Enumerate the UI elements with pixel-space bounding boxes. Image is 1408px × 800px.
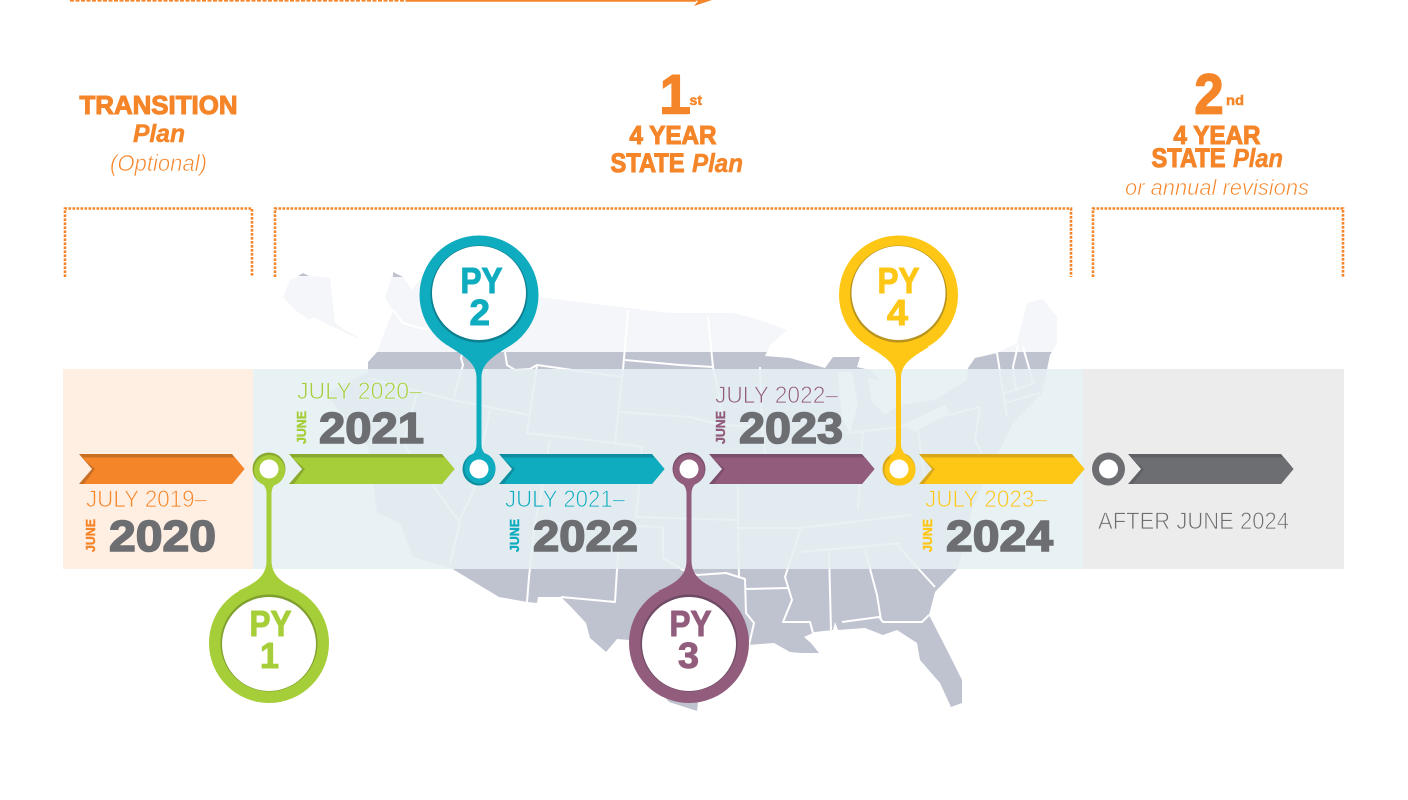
bracket: transition plan [65,208,252,277]
pin: program year 1: PY [250,603,292,644]
heading: 1st 4 year state plan [610,62,743,178]
date label: 2021-2022 [505,486,638,561]
pin: program year 3: 3 [678,635,699,676]
date label: 2019-2020: JULY 2019– [86,486,208,513]
pin: program year 4 [839,236,958,486]
heading: transition plan: Plan [133,120,185,148]
pin: program year 2: 2 [470,292,490,333]
date label: 2020-2021: 2021 [319,404,424,453]
pin: program year 1: 1 [260,635,279,676]
date label: 2019-2020 [83,486,216,561]
pin: program year 3 [629,452,749,703]
date label: 2023-2024: JULY 2023– [925,486,1048,513]
heading: 1st 4 year state plan: Plan [692,148,743,178]
arrow: program year 1 [289,454,454,484]
heading: 2nd 4 year state plan: nd [1226,92,1244,108]
node: after June 2024 [1092,452,1125,486]
heading: 2nd 4 year state plan [1125,62,1309,200]
date label: 2022-2023: JULY 2022– [715,382,839,409]
band: first state plan years [253,369,1083,569]
heading: 1st 4 year state plan: 1 [660,62,689,126]
pin: program year 2 [420,236,538,486]
date label: 2022-2023: 2023 [739,404,843,453]
bracket: second state plan [1093,208,1343,277]
date label: 2019-2020: JUNE [83,519,98,552]
arrow: program year 3 [709,454,874,484]
heading: 2nd 4 year state plan: 4 YEAR [1174,120,1261,150]
map of the United States [283,272,1057,711]
band: after June 2024 [1083,369,1344,569]
band: transition year [63,369,253,569]
heading: transition plan [80,90,238,176]
pin: program year 4: 4 [887,292,908,333]
pin: program year 4: PY [878,260,920,301]
heading: transition plan: TRANSITION [80,90,238,120]
heading: 1st 4 year state plan: STATE [610,148,684,178]
date label: 2023-2024: 2024 [946,512,1054,561]
arrow: program year 4 [919,454,1084,484]
date label: 2020-2021: JULY 2020– [297,378,423,405]
heading: 2nd 4 year state plan: or annual revisions [1125,175,1309,200]
date label: 2020-2021 [294,378,424,453]
bracket: first state plan [275,208,1071,277]
date label: 2021-2022: JULY 2021– [505,486,626,513]
date label: 2021-2022: 2022 [533,512,638,561]
date label: 2021-2022: JUNE [507,519,522,552]
arrow: program year 2 [499,454,664,484]
pin: program year 3: PY [670,603,712,644]
heading: 2nd 4 year state plan: Plan [1233,143,1283,173]
date label: 2020-2021: JUNE [294,411,309,444]
date label: 2023-2024: JUNE [920,519,935,552]
heading: 2nd 4 year state plan: STATE [1152,143,1226,173]
date label: 2022-2023 [713,382,843,453]
pin: program year 1 [209,452,329,703]
heading: 1st 4 year state plan: st [690,92,702,108]
heading: 2nd 4 year state plan: 2 [1194,62,1224,126]
pin: program year 2: PY [460,260,502,301]
heading: 1st 4 year state plan: 4 YEAR [630,120,717,150]
heading: transition plan: (Optional) [110,150,207,176]
date label: 2023-2024 [920,486,1054,561]
arrow: transition year [79,454,244,484]
date label: after June 2024: AFTER JUNE 2024 [1098,508,1289,535]
top arrow line [70,0,712,6]
arrow: after June 2024 [1128,454,1294,484]
date label: 2019-2020: 2020 [109,512,216,561]
date label: 2022-2023: JUNE [713,411,728,444]
